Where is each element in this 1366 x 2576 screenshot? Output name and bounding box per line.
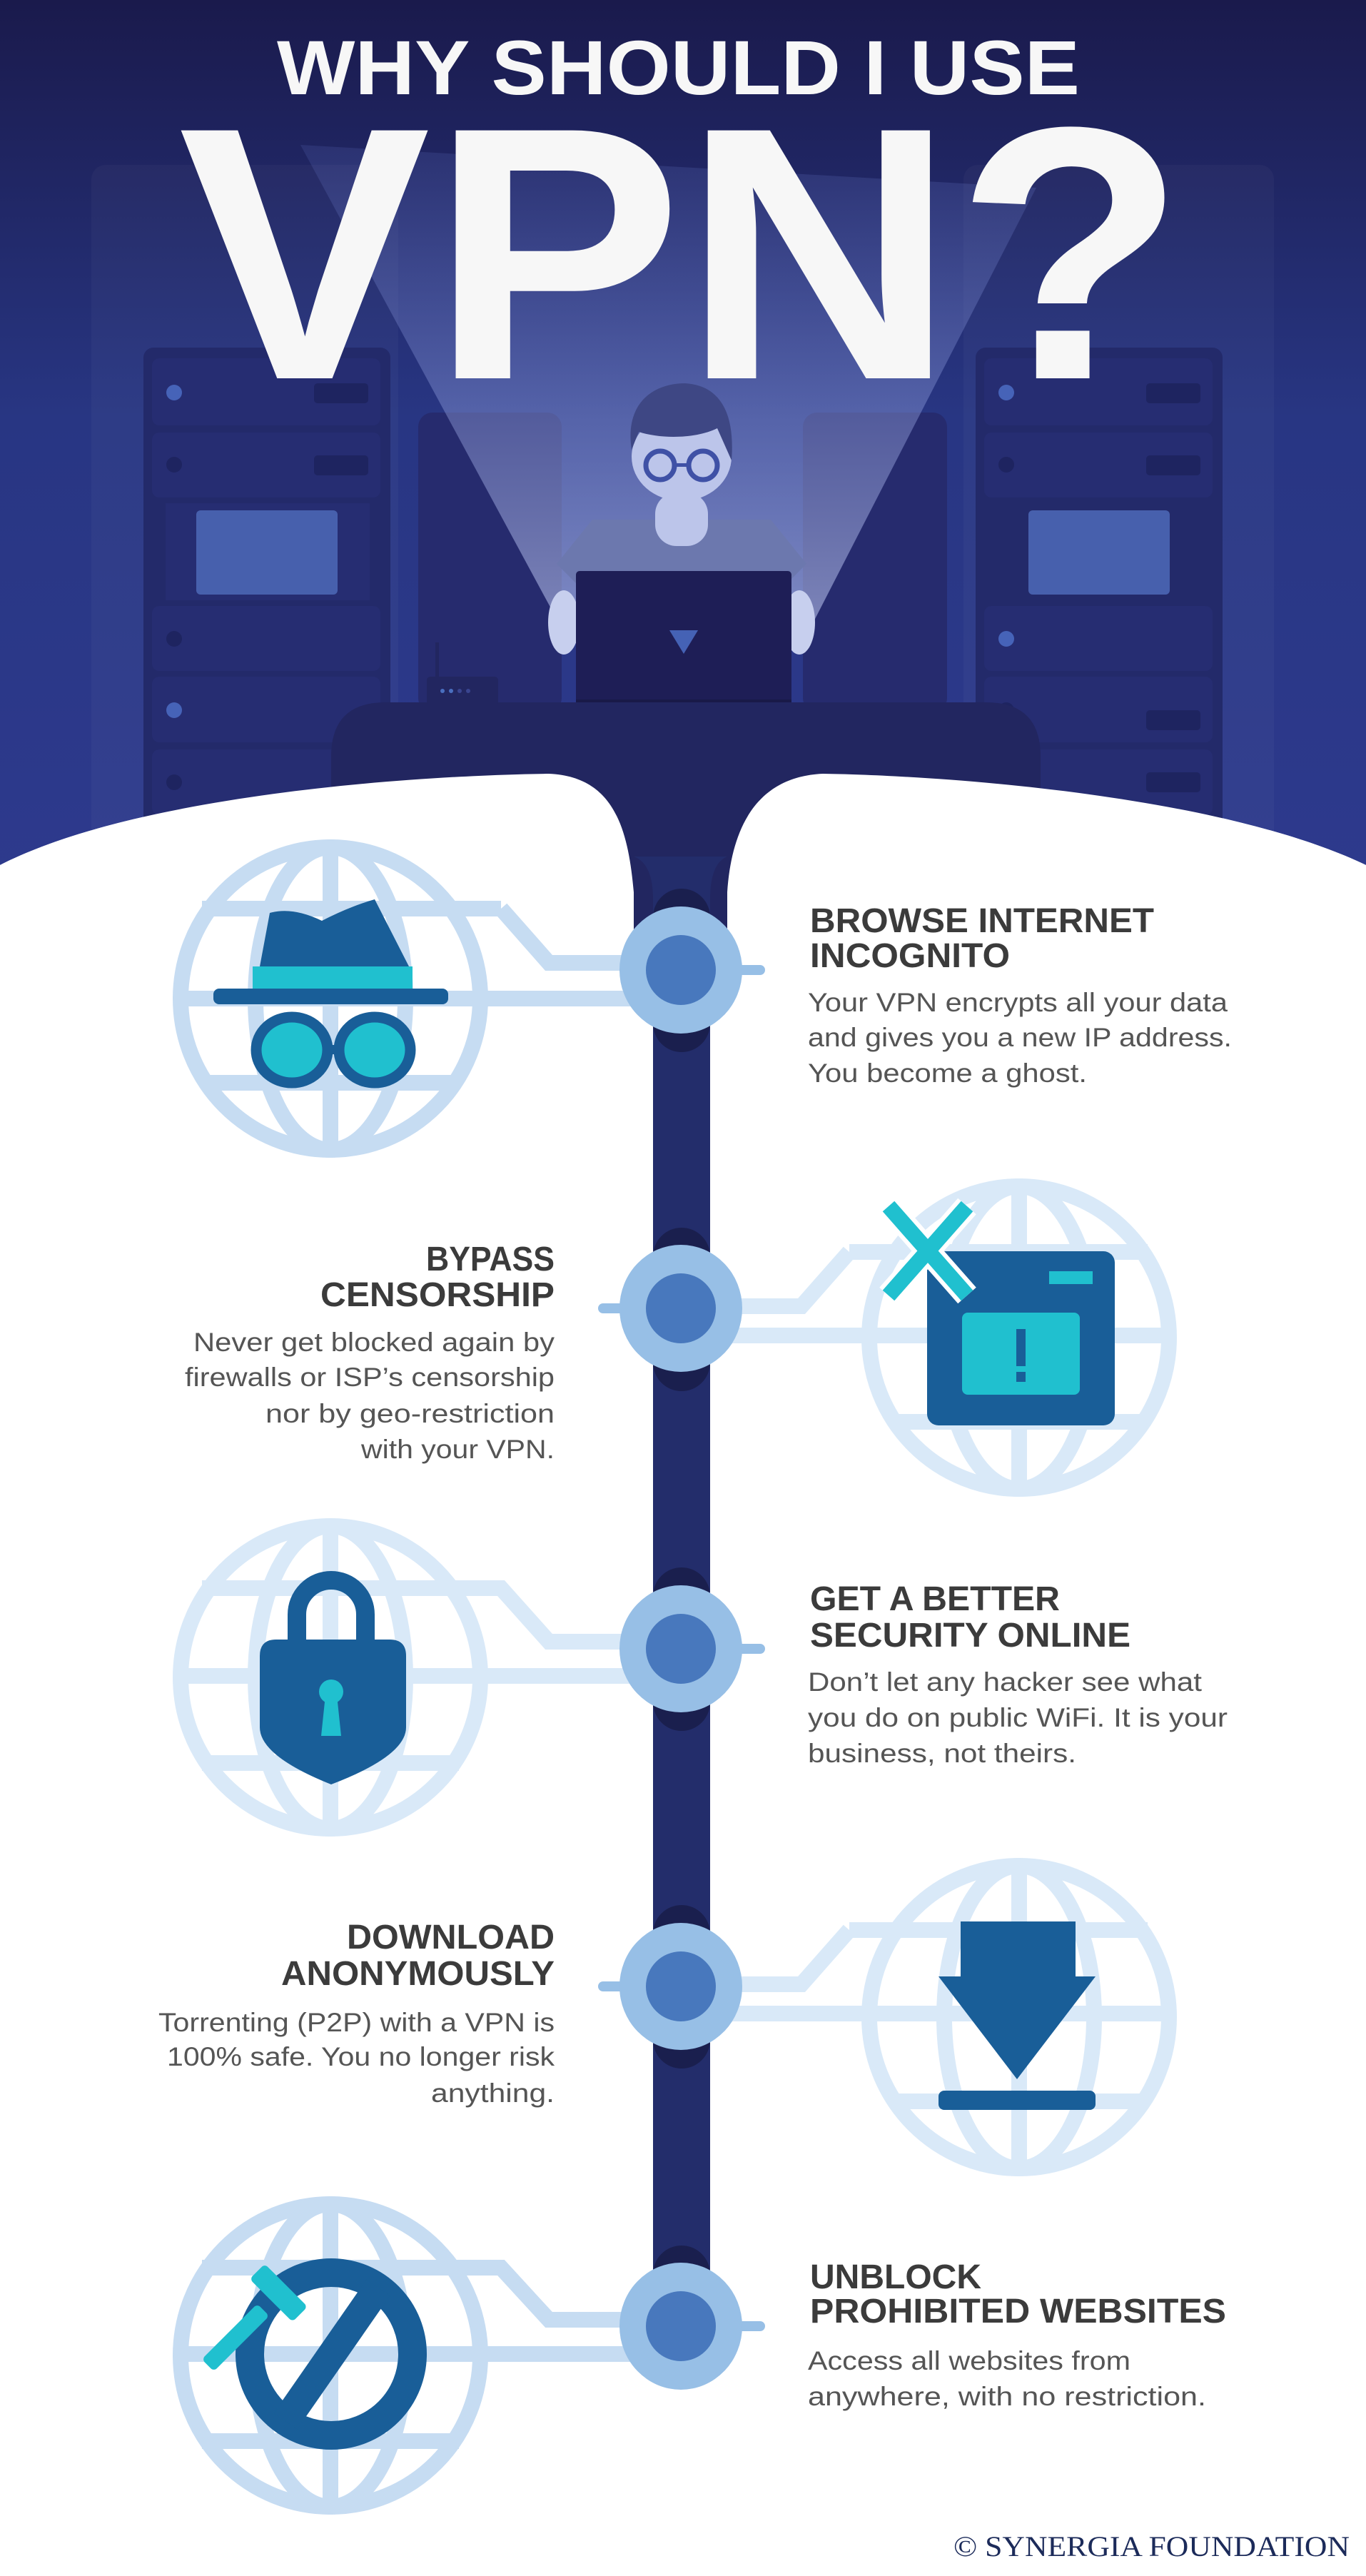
heading: BYPASS — [426, 1241, 555, 1278]
heading — [810, 2258, 1226, 2330]
heading — [320, 1241, 555, 1314]
heading: UNBLOCK — [810, 2258, 981, 2296]
heading: GET A BETTER — [810, 1580, 1060, 1618]
panel: download anonymously — [158, 1866, 1169, 2168]
side panels — [418, 413, 562, 712]
text block: anywhere, with no restriction. — [808, 2382, 1206, 2411]
text block — [185, 1328, 555, 1464]
heading: CENSORSHIP — [320, 1276, 555, 1314]
illustration: person with laptop — [548, 383, 815, 708]
heading: PROHIBITED WEBSITES — [810, 2293, 1226, 2330]
hero background — [0, 0, 1366, 928]
text block: anything. — [431, 2079, 555, 2108]
text block: You become a ghost. — [808, 1059, 1087, 1088]
left rack — [143, 348, 390, 890]
right rack — [976, 348, 1223, 890]
node — [619, 2263, 765, 2390]
icon: globe with prohibition sign — [181, 2204, 642, 2507]
text block: firewalls or ISP’s censorship — [185, 1363, 555, 1392]
heading: SECURITY ONLINE — [810, 1617, 1130, 1655]
heading — [810, 1580, 1130, 1655]
white content area — [0, 774, 1366, 2576]
panel: browse incognito — [181, 847, 1232, 1150]
text block: Don’t let any hacker see what — [808, 1667, 1203, 1697]
heading — [810, 902, 1154, 975]
node — [598, 1923, 742, 2050]
text block — [808, 988, 1232, 1088]
title: WHY SHOULD I USE — [277, 24, 1080, 111]
heading — [281, 1919, 555, 1993]
timeline line — [634, 857, 727, 2317]
text block: Your VPN encrypts all your data — [808, 988, 1228, 1017]
heading: INCOGNITO — [810, 937, 1010, 975]
text block: you do on public WiFi. It is your — [808, 1703, 1228, 1732]
text block — [808, 2346, 1206, 2411]
title: VPN? — [178, 53, 1186, 455]
laptop — [576, 571, 791, 708]
heading: DOWNLOAD — [347, 1919, 555, 1956]
icon: globe with lock — [181, 1526, 642, 1829]
text block: Access all websites from — [808, 2346, 1130, 2375]
illustration: server room — [91, 145, 1274, 890]
icon: globe with incognito hat — [181, 847, 642, 1150]
text block: and gives you a new IP address. — [808, 1023, 1232, 1052]
text block: with your VPN. — [360, 1435, 555, 1464]
node — [598, 1245, 742, 1372]
panel: unblock websites — [181, 2204, 1226, 2507]
heading: ANONYMOUSLY — [281, 1955, 555, 1993]
panel: better security — [181, 1526, 1228, 1829]
desk and router — [331, 642, 1041, 942]
text block: 100% safe. You no longer risk — [167, 2042, 555, 2071]
text block: Never get blocked again by — [193, 1328, 555, 1357]
panel: bypass censorship — [185, 1186, 1169, 1489]
text block: nor by geo-restriction — [265, 1399, 555, 1428]
footer credit: © SYNERGIA FOUNDATION — [953, 2530, 1350, 2562]
text block — [158, 2008, 555, 2108]
icon: globe with blocked window — [714, 1186, 1169, 1489]
light cone — [300, 145, 1036, 620]
node — [619, 1585, 765, 1712]
text block — [808, 1667, 1228, 1768]
icon: globe with download arrow — [714, 1866, 1169, 2168]
text block: Torrenting (P2P) with a VPN is — [158, 2008, 555, 2037]
text block: business, not theirs. — [808, 1739, 1076, 1768]
node — [619, 906, 765, 1034]
heading: BROWSE INTERNET — [810, 902, 1154, 940]
